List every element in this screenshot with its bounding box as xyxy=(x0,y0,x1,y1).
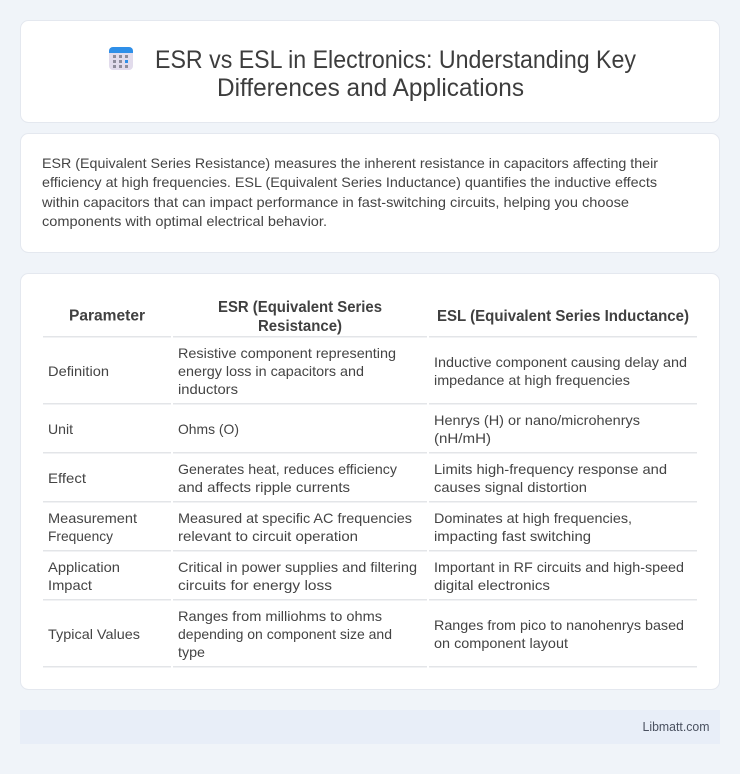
panel: intro xyxy=(20,134,720,252)
row: effect: and affects ripple currents xyxy=(178,479,350,495)
row: application impact: circuits for energy loss xyxy=(178,577,332,593)
intro text: efficiency at high frequencies. ESL (Equivalent Series Inductance) quantifies the inductive effects xyxy=(42,174,657,190)
row: definition: Inductive component causing delay and xyxy=(434,354,687,370)
row: effect xyxy=(48,461,667,495)
row: effect: causes signal distortion xyxy=(434,479,587,495)
row: definition xyxy=(48,345,687,397)
row: typical values: Typical Values xyxy=(48,626,140,642)
intro text: ESR (Equivalent Series Resistance) measures the inherent resistance in capacitors affecting their xyxy=(42,155,658,171)
table header: Parameter xyxy=(69,308,145,324)
row: measurement frequency: Measured at specific AC frequencies xyxy=(178,510,412,526)
title: Differences and Applications xyxy=(217,74,524,102)
title xyxy=(155,46,636,102)
row: effect: Effect xyxy=(48,470,86,486)
row: typical values: depending on component size and xyxy=(178,626,392,642)
row: application impact: Important in RF circuits and high-speed xyxy=(434,559,684,575)
row: unit xyxy=(48,412,640,446)
panel: title header xyxy=(20,20,720,122)
intro text xyxy=(41,155,658,229)
row: measurement frequency: Frequency xyxy=(48,528,113,544)
row: application impact: Impact xyxy=(48,577,92,593)
table header xyxy=(69,299,689,335)
row: application impact: Application xyxy=(48,559,120,575)
row: definition: inductors xyxy=(178,381,238,397)
row: application impact: digital electronics xyxy=(434,577,550,593)
intro text: components with optimal electrical behavior. xyxy=(42,213,327,229)
row: measurement frequency: Measurement xyxy=(48,510,137,526)
row: effect: Limits high-frequency response and xyxy=(434,461,667,477)
row: definition: impedance at high frequencies xyxy=(434,372,630,388)
row: definition: Definition xyxy=(48,363,109,379)
row: typical values: type xyxy=(178,644,205,660)
row: measurement frequency: relevant to circuit operation xyxy=(178,528,358,544)
row: unit: Henrys (H) or nano/microhenrys xyxy=(434,412,640,428)
panel: comparison table xyxy=(20,274,720,690)
footer xyxy=(20,710,720,744)
row: effect: Generates heat, reduces efficiency xyxy=(178,461,397,477)
intro text: within capacitors that can impact performance in fast-switching circuits, helping you choose xyxy=(41,194,629,210)
row: unit: Ohms (O) xyxy=(178,421,239,437)
table header: Resistance) xyxy=(258,318,342,335)
row: definition: Resistive component representing xyxy=(178,345,396,361)
row: application impact xyxy=(48,559,684,593)
icon: calendar xyxy=(109,47,133,70)
row: definition: energy loss in capacitors and xyxy=(178,363,364,379)
title: ESR vs ESL in Electronics: Understanding Key xyxy=(155,46,636,74)
row: typical values xyxy=(48,608,684,660)
table header: ESL (Equivalent Series Inductance) xyxy=(437,308,689,325)
row: application impact: Critical in power supplies and filtering xyxy=(178,559,417,575)
row: measurement frequency xyxy=(48,510,632,544)
footer: Libmatt.com xyxy=(642,720,710,734)
row: measurement frequency: impacting fast switching xyxy=(434,528,591,544)
table header: ESR (Equivalent Series xyxy=(218,299,382,316)
row: unit: (nH/mH) xyxy=(434,430,491,446)
row: unit: Unit xyxy=(48,421,73,437)
row: typical values: on component layout xyxy=(434,635,568,651)
row: typical values: Ranges from milliohms to ohms xyxy=(178,608,382,624)
row: typical values: Ranges from pico to nanohenrys based xyxy=(434,617,684,633)
row: measurement frequency: Dominates at high frequencies, xyxy=(434,510,632,526)
